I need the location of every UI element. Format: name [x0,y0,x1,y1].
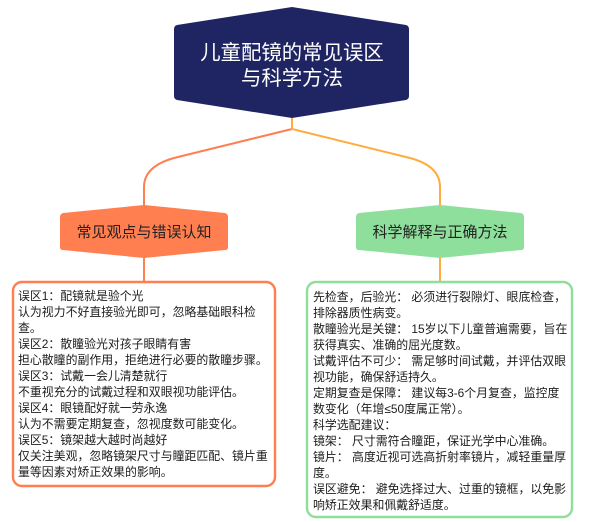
left text block: misconceptions: 误区3：试戴一会儿清楚就行 [18,369,167,383]
connector: title to right node [292,118,440,206]
left box outline [13,282,275,486]
left text block: misconceptions: 误区4：眼镜配好就一劳永逸 [18,401,167,415]
left text block: misconceptions: 认为不需要定期复查，忽视度数可能变化。 [18,417,244,431]
right text block: scientific methods: 视功能，确保舒适持久。 [313,370,444,384]
left text block: misconceptions: 查。 [18,321,42,335]
title node: 儿童配镜的常见误区 [200,42,384,64]
title node: 与科学方法 [241,67,343,90]
left text block: misconceptions: 担心散瞳的副作用，拒绝进行必要的散瞳步骤。 [18,353,268,367]
right text block: scientific methods [313,290,567,512]
right text block: scientific methods: 排除器质性病变。 [313,306,408,320]
right text block: scientific methods: 镜片： 高度近视可选高折射率镜片，减轻重量厚 [313,450,566,464]
right text block: scientific methods: 先检查，后验光： 必须进行裂隙灯、眼底检查， [313,290,566,304]
title node [174,7,409,118]
right text block: scientific methods: 定期复查是保障： 建议每3-6个月复查，监控度 [313,386,559,400]
right text block: scientific methods: 数变化（年增≤50度属正常）。 [313,402,470,416]
left text block: misconceptions: 量等因素对矫正效果的影响。 [18,465,173,479]
right text block: scientific methods: 科学选配建议： [313,418,396,432]
right text block: scientific methods: 试戴评估不可少： 需足够时间试戴，并评估双眼 [313,354,566,368]
right node: 科学解释与正确方法 [372,224,508,241]
right text block: scientific methods: 获得真实、准确的屈光度数。 [313,338,468,352]
left text block: misconceptions [18,289,268,479]
right box outline [307,282,572,517]
left text block: misconceptions: 不重视充分的试戴过程和双眼视功能评估。 [18,385,244,399]
connector: right node to right box [439,258,441,282]
right text block: scientific methods: 散瞳验光是关键： 15岁以下儿童普遍需要，旨在 [313,322,567,336]
left text block: misconceptions: 误区1：配镜就是验个光 [18,289,144,303]
left text block: misconceptions: 误区2：散瞳验光对孩子眼睛有害 [18,337,191,351]
left node: 常见观点与错误认知 [76,224,212,241]
connector: left node to left box [143,258,145,282]
left text block: misconceptions: 认为视力不好直接验光即可，忽略基础眼科检 [18,305,256,319]
right text block: scientific methods: 镜架： 尺寸需符合瞳距，保证光学中心准确。 [313,434,554,448]
left text block: misconceptions: 误区5：镜架越大越时尚越好 [18,433,167,447]
left node [60,205,228,258]
right text block: scientific methods: 度。 [313,466,337,480]
connector: title to left node [144,129,292,206]
right node [356,205,524,258]
right text block: scientific methods: 误区避免： 避免选择过大、过重的镜框，以免影 [313,482,566,496]
right text block: scientific methods: 响矫正效果和佩戴舒适度。 [313,498,456,512]
left text block: misconceptions: 仅关注美观，忽略镜架尺寸与瞳距匹配、镜片重 [18,449,268,463]
